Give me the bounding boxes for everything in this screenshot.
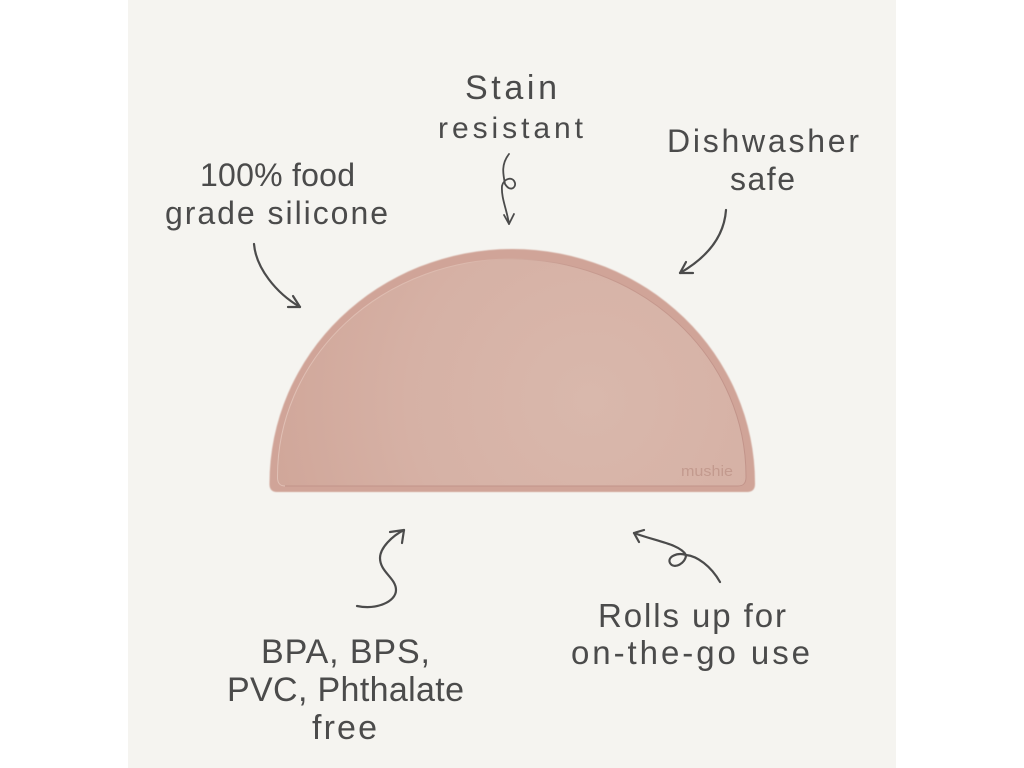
brand mark: mushie <box>681 463 733 480</box>
label: stain resistant: resistant <box>438 112 584 145</box>
placemat <box>269 249 755 492</box>
mat outer rim <box>269 249 755 492</box>
arrow: food grade silicone <box>254 244 300 307</box>
label: food grade silicone: 100% food <box>200 157 355 193</box>
mat bottom edge line <box>285 485 738 487</box>
label: rolls up: Rolls up for <box>598 597 786 634</box>
arrow: stain resistant <box>502 154 515 224</box>
arrow: rolls up <box>634 530 720 582</box>
background panel <box>128 0 896 768</box>
label: chemical free: BPA, BPS, <box>261 633 430 671</box>
label: stain resistant: Stain <box>465 69 557 107</box>
label: rolls up: on-the-go use <box>571 634 810 671</box>
label: stain resistant <box>438 69 584 145</box>
mat inner edge line <box>277 259 746 486</box>
label: food grade silicone <box>165 157 388 231</box>
label: dishwasher safe: safe <box>730 161 795 197</box>
label: dishwasher safe: Dishwasher <box>667 123 859 159</box>
label: rolls up <box>571 597 810 671</box>
label: food grade silicone: grade silicone <box>165 195 388 231</box>
label: chemical free: PVC, Phthalate <box>227 671 464 709</box>
label: chemical free: free <box>312 709 377 747</box>
arrow: dishwasher safe <box>680 210 726 273</box>
label: chemical free <box>227 633 464 747</box>
label: dishwasher safe <box>667 123 859 197</box>
mat inner surface <box>277 259 746 486</box>
arrow: chemical free <box>357 530 404 607</box>
